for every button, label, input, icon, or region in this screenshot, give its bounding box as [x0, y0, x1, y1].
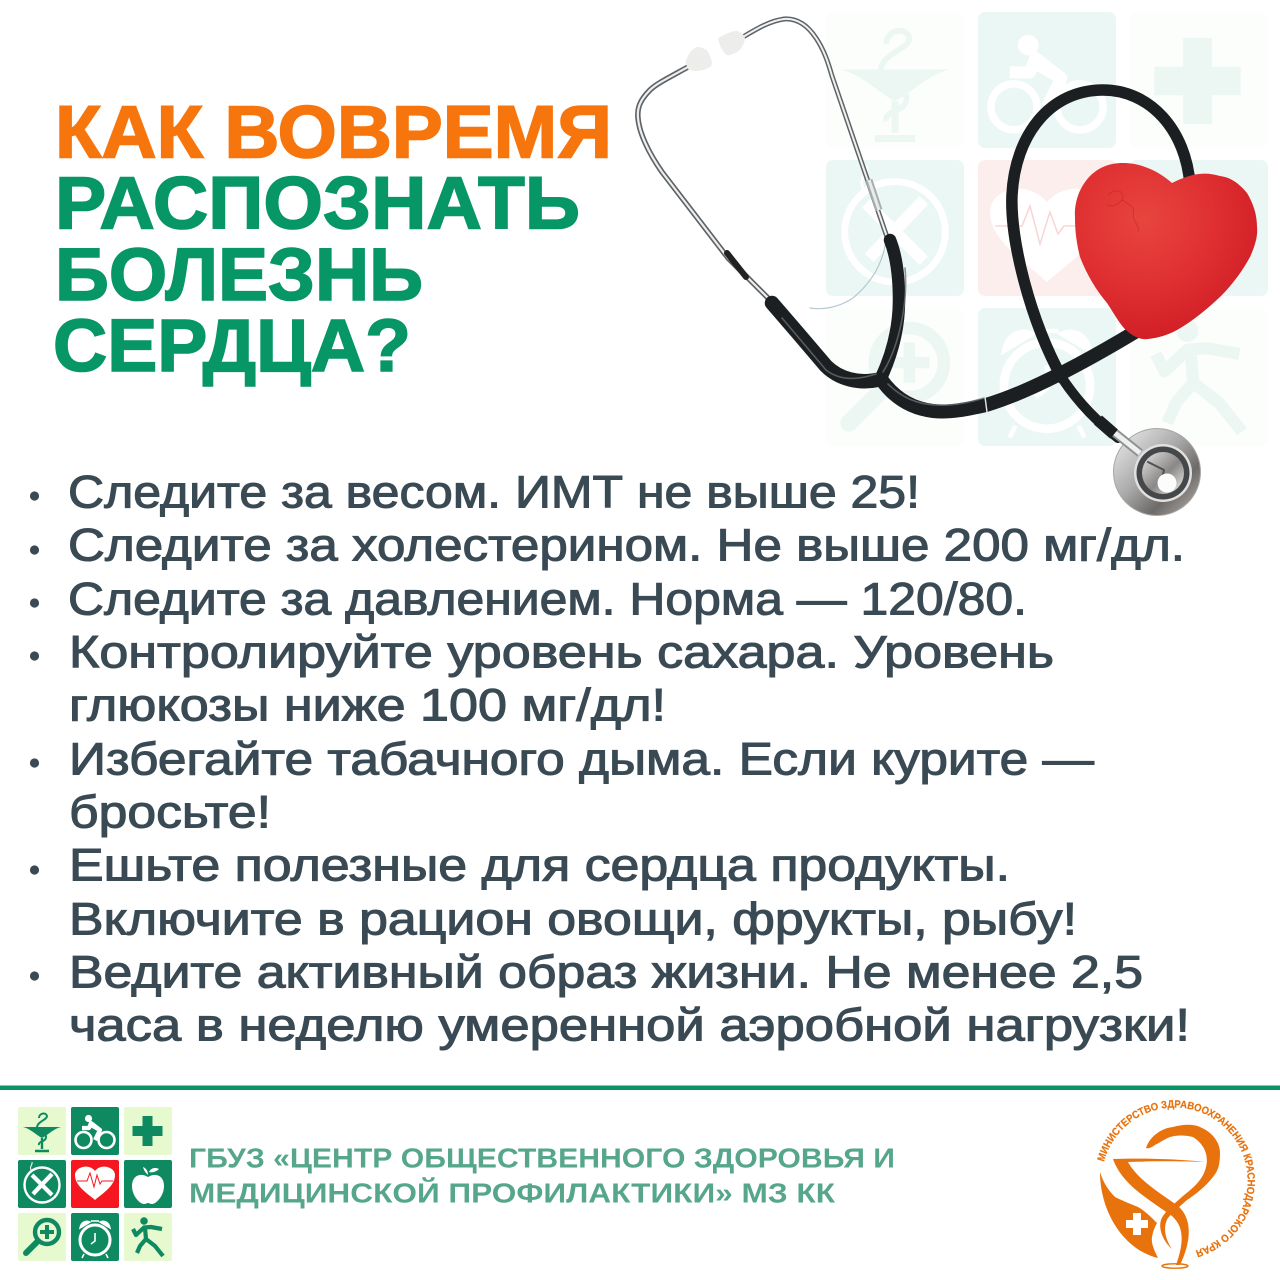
ghost icon grid behind stethoscope	[826, 12, 1268, 446]
ear tips	[686, 31, 745, 71]
white cross	[1126, 1213, 1148, 1235]
list text: Ведите активный образ жизни. Не менее 2,5	[69, 946, 1143, 998]
organisation name: ГБУЗ «ЦЕНТР ОБЩЕСТВЕННОГО ЗДОРОВЬЯ И	[189, 1142, 895, 1174]
organisation name	[189, 1142, 895, 1208]
list text: Контролируйте уровень сахара. Уровень	[69, 626, 1054, 678]
bullet list	[30, 466, 1190, 1050]
stethoscope	[638, 19, 1200, 515]
emblem ring text: МИНИСТЕРСТВО ЗДРАВООХРАНЕНИЯ КРАСНОДАРСКОГО КРАЯ	[1097, 1100, 1256, 1258]
title	[53, 90, 612, 387]
bowl stand	[1162, 1264, 1188, 1268]
list text: бросьте!	[69, 786, 271, 838]
organisation name: МЕДИЦИНСКОЙ ПРОФИЛАКТИКИ» МЗ КК	[189, 1176, 836, 1208]
ministry emblem	[1097, 1100, 1256, 1269]
footer logo grid	[18, 1107, 172, 1261]
list text: Следите за давлением. Норма — 120/80.	[68, 574, 1027, 624]
black tubing	[772, 90, 1190, 438]
list text: глюкозы ниже 100 мг/дл!	[69, 680, 666, 730]
title: СЕРДЦА?	[53, 304, 411, 387]
list text: Следите за холестерином. Не выше 200 мг/дл.	[68, 520, 1185, 570]
chest piece	[1098, 420, 1200, 516]
list text: часа в неделю умеренной аэробной нагрузки!	[69, 1000, 1190, 1050]
icon: red heart	[1075, 163, 1257, 339]
list text: Следите за весом. ИМТ не выше 25!	[68, 466, 920, 518]
crescent	[1100, 1172, 1158, 1258]
title: БОЛЕЗНЬ	[55, 233, 423, 316]
title: РАСПОЗНАТЬ	[55, 162, 580, 244]
bowl	[1113, 1159, 1204, 1265]
metal binaural tubes	[638, 19, 888, 309]
list text	[68, 466, 1190, 1050]
list text: Включите в рацион овощи, фрукты, рыбу!	[69, 894, 1077, 944]
bullet markers	[30, 491, 39, 981]
title: КАК ВОВРЕМЯ	[55, 90, 612, 174]
list text: Избегайте табачного дыма. Если курите —	[69, 734, 1094, 784]
snake	[1146, 1125, 1220, 1249]
list text: Ешьте полезные для сердца продукты.	[69, 840, 1010, 890]
footer divider	[0, 1086, 1280, 1090]
